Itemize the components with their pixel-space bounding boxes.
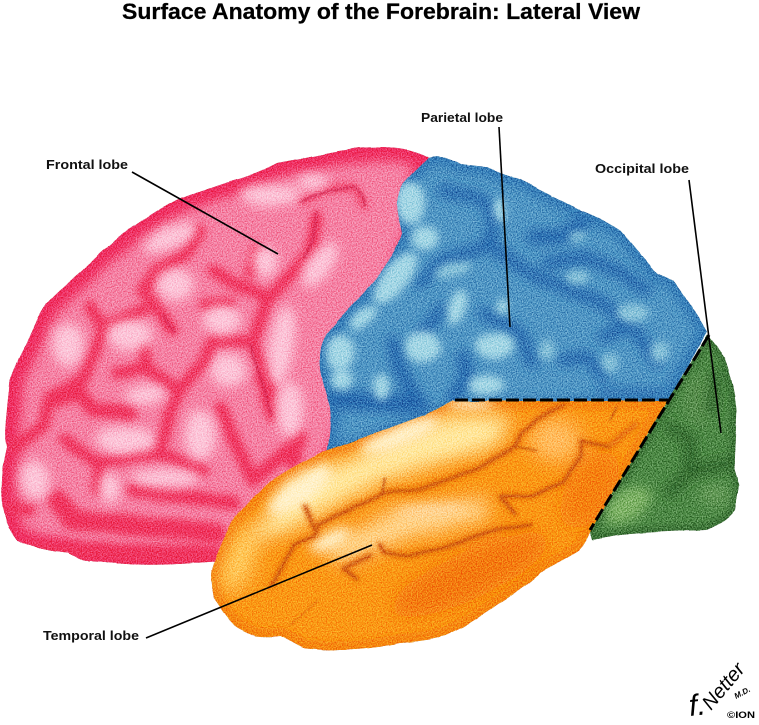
signature: ©ION [727, 710, 755, 720]
label: occipital lobe [595, 161, 721, 433]
signature: f. [687, 688, 707, 723]
label: temporal lobe [43, 545, 372, 643]
panel: frontal lobe [2, 147, 428, 565]
panel: temporal lobe [212, 399, 667, 650]
label: occipital lobe: Occipital lobe [595, 161, 689, 176]
signature: Netter [698, 658, 750, 714]
signature: M.D. [733, 685, 752, 701]
signature [687, 658, 755, 723]
label: frontal lobe [46, 157, 278, 254]
label: parietal lobe: Parietal lobe [421, 110, 503, 125]
panel: occipital lobe [590, 335, 739, 540]
label: temporal lobe: Temporal lobe [43, 628, 139, 643]
lobe boundary: dashed lines [455, 335, 709, 530]
label: parietal lobe [421, 110, 510, 327]
brain illustration [2, 147, 739, 650]
panel: parietal lobe [320, 157, 708, 458]
label: frontal lobe: Frontal lobe [46, 157, 128, 172]
